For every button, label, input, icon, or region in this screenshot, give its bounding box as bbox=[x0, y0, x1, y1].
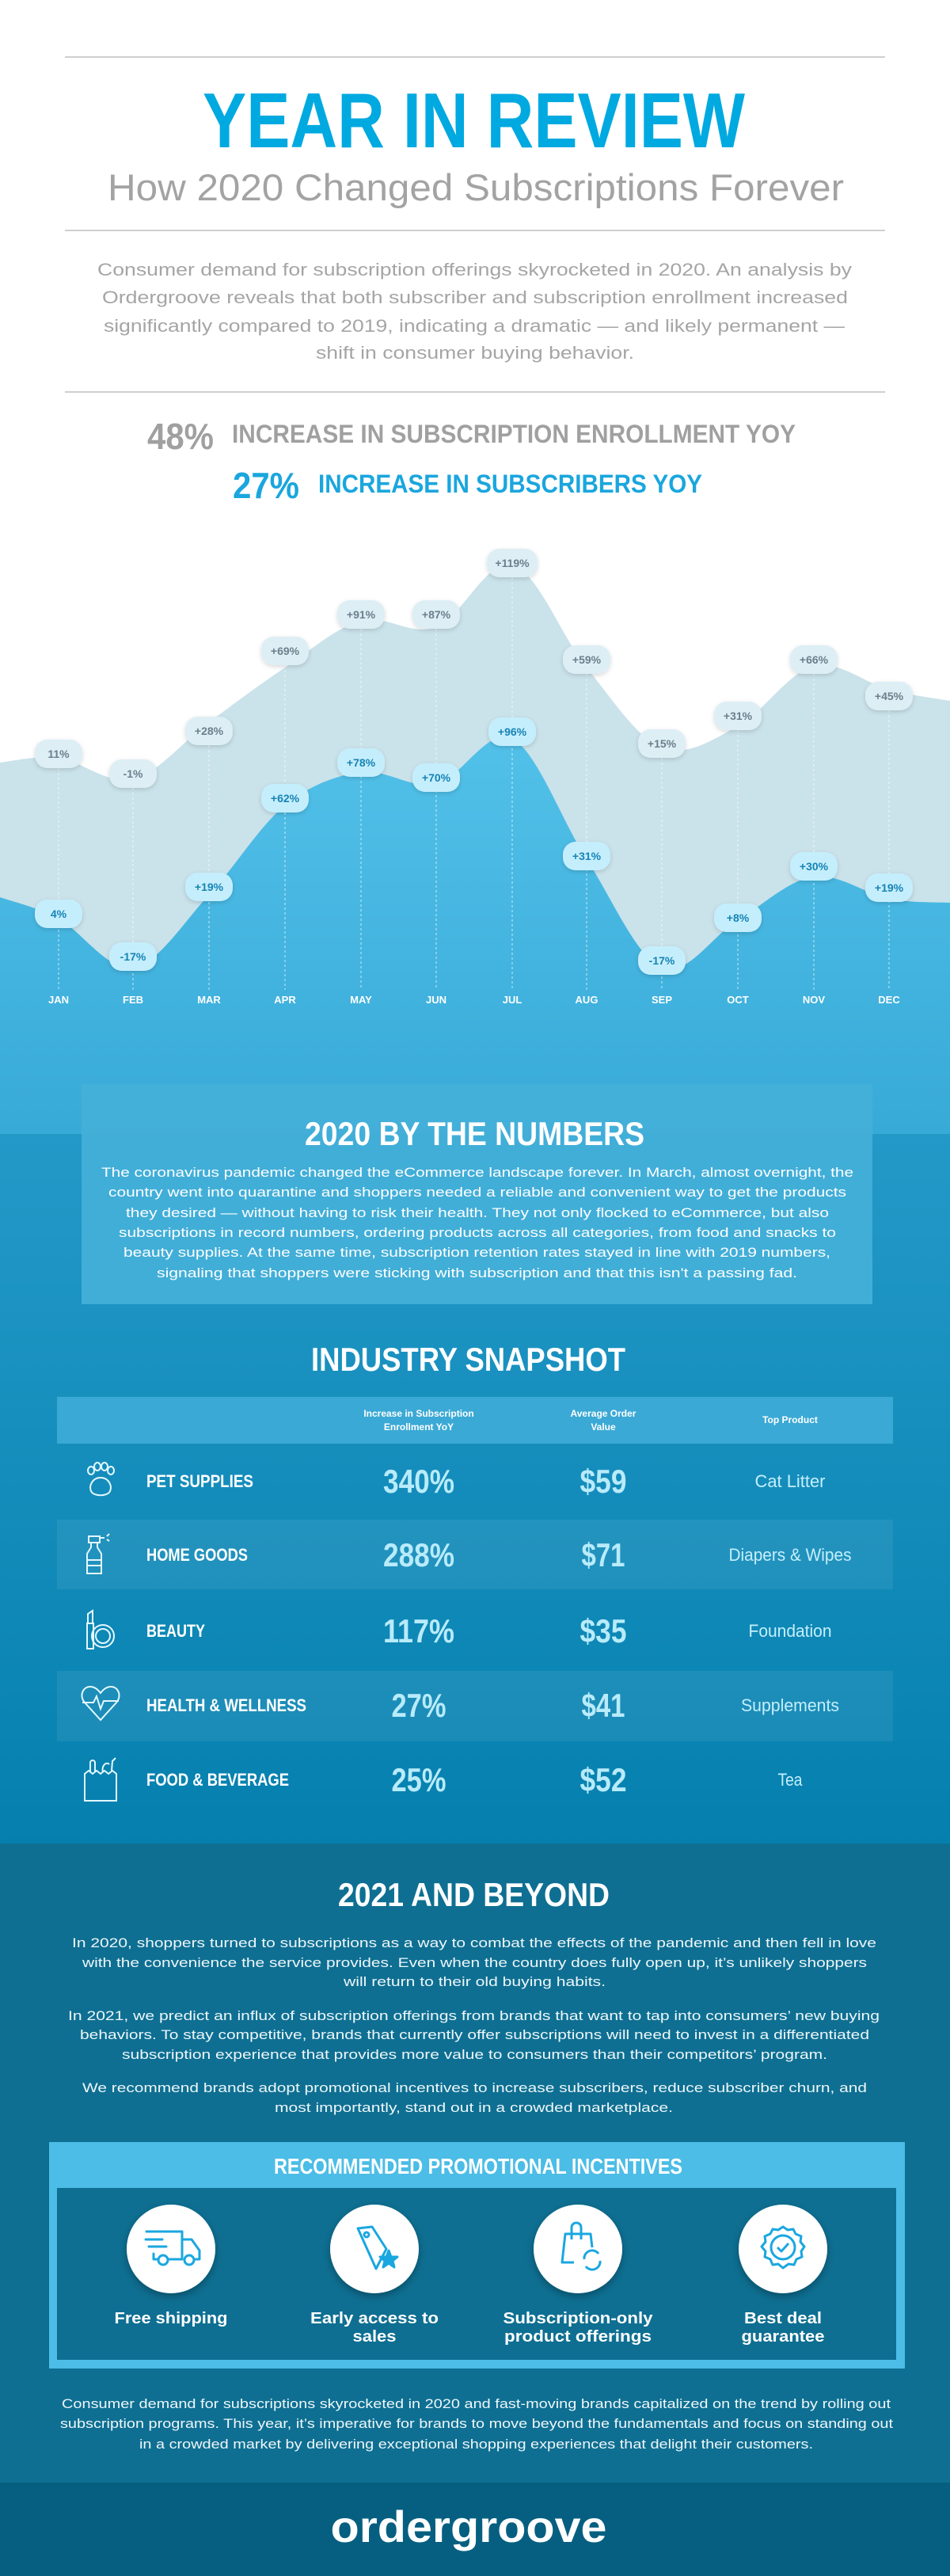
paragraphs: 2021 outlook: behaviors. To stay competitive, brands that currently offer subscriptions will need to invest in a differentiated bbox=[80, 2027, 869, 2042]
icon: tag with star bbox=[358, 2227, 397, 2269]
row: food & beverage: 25% bbox=[391, 1761, 446, 1798]
row: home goods: 288% bbox=[383, 1536, 454, 1573]
icon: paw bbox=[88, 1463, 114, 1495]
icon: lipstick and compact bbox=[87, 1611, 114, 1649]
subscriber pills (lower): 4% bbox=[51, 907, 67, 920]
subscriber pills (lower): +70% bbox=[422, 771, 451, 784]
incentive: subscription-only product offerings: Subscription-only bbox=[504, 2310, 653, 2327]
table header: Average Order bbox=[571, 1408, 636, 1419]
enrollment pills (upper): +31% bbox=[724, 710, 753, 722]
subscriber pills (lower): +8% bbox=[727, 911, 750, 924]
paragraph: pandemic: country went into quarantine and shoppers needed a reliable and convenient way to get the products bbox=[108, 1185, 846, 1200]
paragraphs: 2021 outlook: We recommend brands adopt promotional incentives to increase subscribers, reduce subscriber churn, and bbox=[82, 2080, 867, 2095]
incentive: early access to sales bbox=[310, 2205, 439, 2346]
stat: 27% subscribers bbox=[233, 465, 702, 506]
closing paragraph: subscription programs. This year, it’s imperative for brands to move beyond the fundamentals and focus on standing out bbox=[60, 2416, 893, 2431]
enrollment pills (upper): +45% bbox=[875, 690, 904, 702]
incentive: subscription-only product offerings bbox=[504, 2205, 653, 2346]
row: pet supplies: Cat Litter bbox=[755, 1471, 825, 1491]
heading: recommended promotional incentives: RECOMMENDED PROMOTIONAL INCENTIVES bbox=[274, 2154, 682, 2178]
paragraph: pandemic: The coronavirus pandemic changed the eCommerce landscape forever. In March, almost overnight, the bbox=[101, 1165, 853, 1180]
incentive: best deal guarantee: Best deal bbox=[744, 2310, 822, 2327]
subscriber pills (lower): +19% bbox=[195, 881, 224, 893]
table header: Top Product bbox=[762, 1414, 818, 1425]
subscriber pills (lower): -17% bbox=[120, 950, 146, 963]
paragraphs: 2021 outlook: most importantly, stand out in a crowded marketplace. bbox=[275, 2100, 673, 2115]
subscriber pills (lower): +78% bbox=[347, 756, 376, 769]
subscriber pills (lower): +96% bbox=[498, 725, 527, 738]
row: beauty: $35 bbox=[580, 1612, 627, 1649]
area chart: monthly growth bbox=[0, 549, 950, 1134]
icon: heart pulse bbox=[82, 1687, 120, 1720]
icon: spray bottle bbox=[87, 1534, 109, 1573]
paragraphs: 2021 outlook: subscription experience that provides more value to consumers than their competitors’ program. bbox=[122, 2047, 827, 2062]
month axis labels: JUN bbox=[426, 994, 446, 1006]
month axis labels bbox=[48, 994, 900, 1006]
title: YEAR IN REVIEW bbox=[203, 77, 745, 164]
row: health & wellness bbox=[82, 1687, 839, 1724]
paragraphs: 2021 outlook: will return to their old buying habits. bbox=[343, 1974, 606, 1989]
row: pet supplies bbox=[88, 1463, 825, 1500]
row: food & beverage: FOOD & BEVERAGE bbox=[146, 1770, 289, 1790]
footer bbox=[0, 2483, 950, 2576]
row: home goods: HOME GOODS bbox=[146, 1545, 248, 1565]
subscriber pills (lower): +30% bbox=[800, 860, 829, 873]
month axis labels: MAR bbox=[197, 994, 221, 1006]
paragraph: pandemic: they desired — without having to risk their health. They not only flocked to eCommerce, but also bbox=[126, 1205, 829, 1220]
enrollment pills (upper): +69% bbox=[271, 645, 300, 657]
incentive: free shipping: Free shipping bbox=[114, 2310, 228, 2327]
paragraph: pandemic: beauty supplies. At the same time, subscription retention rates stayed in line with 2019 numbers, bbox=[124, 1245, 830, 1260]
heading: industry snapshot: INDUSTRY SNAPSHOT bbox=[311, 1341, 625, 1378]
month axis labels: DEC bbox=[878, 994, 900, 1006]
intro paragraph: Consumer demand for subscription offerings skyrocketed in 2020. An analysis by bbox=[97, 260, 852, 280]
row: pet supplies: PET SUPPLIES bbox=[146, 1471, 253, 1491]
logo: ordergroove: ordergroove bbox=[331, 2502, 606, 2551]
icon: badge with check bbox=[762, 2227, 804, 2268]
enrollment pills (upper): +119% bbox=[495, 557, 530, 569]
stat: 48% enrollment: 48% bbox=[147, 416, 214, 457]
row: beauty bbox=[87, 1611, 831, 1649]
month axis labels: OCT bbox=[727, 994, 749, 1006]
row: home goods bbox=[87, 1534, 852, 1573]
stat: 27% subscribers: 27% bbox=[233, 465, 299, 506]
table header: Value bbox=[591, 1421, 616, 1433]
paragraphs: 2021 outlook bbox=[68, 1935, 880, 2115]
row: pet supplies: $59 bbox=[580, 1463, 627, 1500]
row: beauty: 117% bbox=[383, 1612, 454, 1649]
heading: 2020 by the numbers: 2020 BY THE NUMBERS bbox=[305, 1115, 644, 1152]
paragraph: pandemic: subscriptions in record numbers, ordering products across all categories, from food and snacks to bbox=[119, 1225, 836, 1240]
enrollment pills (upper): -1% bbox=[124, 767, 143, 780]
row: home goods: Diapers & Wipes bbox=[728, 1545, 852, 1565]
table header bbox=[57, 1397, 893, 1444]
incentive: early access to sales: Early access to bbox=[310, 2310, 439, 2327]
icon: grocery bag bbox=[85, 1758, 116, 1801]
row: home goods: $71 bbox=[581, 1536, 625, 1573]
incentive: best deal guarantee: guarantee bbox=[741, 2328, 825, 2346]
subscriber pills (lower): -17% bbox=[649, 954, 675, 967]
paragraphs: 2021 outlook: with the convenience the service provides. Even when the country does fully open up, it’s unlikely shoppers bbox=[82, 1955, 867, 1970]
closing paragraph: Consumer demand for subscriptions skyrocketed in 2020 and fast-moving brands capitalized on the trend by rolling out bbox=[62, 2396, 891, 2411]
enrollment pills (upper): +87% bbox=[422, 608, 451, 621]
row: health & wellness: Supplements bbox=[741, 1695, 839, 1715]
table: industry snapshot bbox=[57, 1397, 893, 1801]
row: health & wellness: HEALTH & WELLNESS bbox=[146, 1695, 306, 1715]
stat: 27% subscribers: INCREASE IN SUBSCRIBERS YOY bbox=[318, 470, 702, 498]
closing paragraph bbox=[60, 2396, 893, 2452]
month axis labels: AUG bbox=[576, 994, 598, 1006]
row: food & beverage: Tea bbox=[777, 1770, 803, 1790]
stat: 48% enrollment bbox=[147, 416, 796, 457]
intro paragraph: significantly compared to 2019, indicating a dramatic — and likely permanent — bbox=[104, 316, 845, 336]
row: food & beverage bbox=[85, 1758, 803, 1801]
row: beauty: Foundation bbox=[749, 1621, 831, 1641]
month axis labels: JAN bbox=[48, 994, 69, 1006]
closing paragraph: in a crowded market by delivering exceptional shopping experiences that delight their customers. bbox=[139, 2437, 813, 2452]
enrollment pills (upper): +59% bbox=[572, 653, 602, 666]
month axis labels: FEB bbox=[123, 994, 143, 1006]
table header: Increase in Subscription bbox=[363, 1408, 474, 1419]
icon: truck bbox=[146, 2232, 200, 2265]
intro paragraph bbox=[97, 260, 852, 363]
enrollment pills (upper) bbox=[35, 549, 913, 788]
row: health & wellness: 27% bbox=[391, 1687, 446, 1724]
enrollment pills (upper): +15% bbox=[648, 737, 677, 750]
stat: 48% enrollment: INCREASE IN SUBSCRIPTION ENROLLMENT YOY bbox=[232, 420, 796, 448]
row: pet supplies: 340% bbox=[383, 1463, 454, 1500]
subscriber pills (lower): +19% bbox=[875, 881, 904, 894]
heading: 2021 and beyond: 2021 AND BEYOND bbox=[338, 1876, 610, 1913]
subscriber pills (lower) bbox=[35, 717, 913, 975]
row: beauty: BEAUTY bbox=[146, 1621, 205, 1641]
paragraph: pandemic bbox=[101, 1165, 853, 1280]
enrollment pills (upper): +66% bbox=[800, 653, 829, 666]
subtitle: How 2020 Changed Subscriptions Forever bbox=[108, 166, 844, 208]
subscriber pills (lower): +62% bbox=[271, 792, 300, 805]
panel: recommended promotional incentives bbox=[49, 2142, 905, 2369]
incentive: early access to sales: sales bbox=[353, 2328, 396, 2346]
enrollment pills (upper): +28% bbox=[195, 725, 224, 737]
month axis labels: MAY bbox=[350, 994, 372, 1006]
paragraphs: 2021 outlook: In 2020, shoppers turned to subscriptions as a way to combat the effects of the pandemic and then fell in love bbox=[72, 1935, 876, 1950]
incentive: subscription-only product offerings: product offerings bbox=[504, 2328, 652, 2346]
row: food & beverage: $52 bbox=[580, 1761, 627, 1798]
intro paragraph: Ordergroove reveals that both subscriber and subscription enrollment increased bbox=[102, 287, 848, 307]
month axis labels: NOV bbox=[803, 994, 825, 1006]
enrollment pills (upper): +91% bbox=[347, 608, 376, 621]
incentive: best deal guarantee bbox=[739, 2205, 827, 2346]
month axis labels: APR bbox=[274, 994, 296, 1006]
icon: bag with refresh bbox=[562, 2223, 600, 2270]
month axis labels: JUL bbox=[503, 994, 522, 1006]
enrollment pills (upper): 11% bbox=[48, 748, 70, 760]
intro paragraph: shift in consumer buying behavior. bbox=[316, 343, 634, 363]
panel: 2020 by the numbers bbox=[82, 1084, 872, 1304]
paragraphs: 2021 outlook: In 2021, we predict an influx of subscription offerings from brands that want to tap into consumers’ new buying bbox=[68, 2008, 880, 2023]
month axis labels: SEP bbox=[652, 994, 672, 1006]
paragraph: pandemic: signaling that shoppers were sticking with subscription and that this isn't a passing fad. bbox=[157, 1265, 797, 1280]
section: 2021 and beyond bbox=[68, 1876, 880, 2115]
row: health & wellness: $41 bbox=[581, 1687, 625, 1724]
table header: Enrollment YoY bbox=[384, 1421, 454, 1433]
incentive: free shipping bbox=[114, 2205, 228, 2327]
subscriber pills (lower): +31% bbox=[572, 850, 602, 862]
